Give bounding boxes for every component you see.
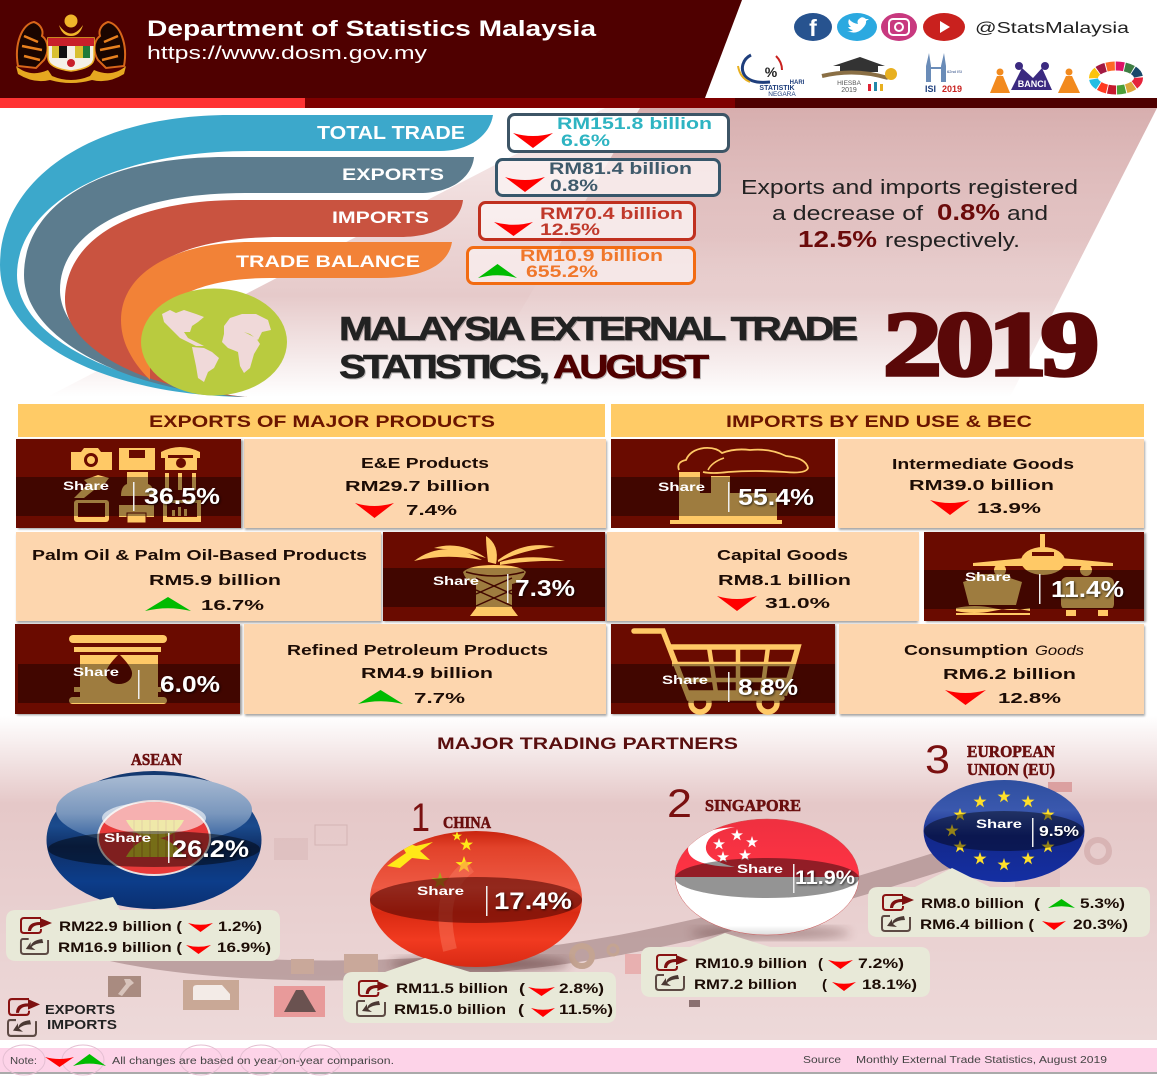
band: share palm oil — [383, 568, 605, 607]
logo: hiesba 2019: 2019 — [841, 87, 857, 94]
rank: 1: 1 — [411, 796, 430, 840]
logo: hari statistik negara: HARI — [790, 80, 805, 86]
band: ASEAN share: Share — [104, 831, 151, 845]
logo: hiesba 2019 — [822, 57, 897, 94]
logo: isi 2019: 2019 — [942, 84, 962, 94]
band: share capital: 11.4% — [1051, 576, 1124, 602]
partner: European Union — [868, 738, 1150, 937]
band: share E&E: 36.5% — [144, 483, 220, 509]
text: E&E values: E&E Products — [361, 455, 489, 472]
text: social handle: @StatsMalaysia — [975, 20, 1129, 37]
globe: China flag — [370, 831, 582, 967]
stat box: total trade: 6.6% — [561, 131, 610, 150]
stat box: trade balance: RM10.9 billion — [520, 246, 663, 265]
partner: Singapore — [641, 782, 930, 997]
heading: exports of major products: EXPORTS OF MAJOR PRODUCTS — [149, 412, 495, 431]
label: European Union — [967, 742, 1056, 779]
band: Singapore share: 11.9% — [795, 868, 855, 889]
band: EU share: Share — [976, 817, 1022, 831]
band: share palm oil: Share — [433, 574, 479, 588]
text block: summary statement: 0.8% — [937, 199, 1000, 225]
panel: palm oil products — [16, 532, 605, 621]
callout: Singapore trade values — [641, 933, 930, 997]
heading: imports by end use and bec: IMPORTS BY END USE & BEC — [726, 412, 1032, 431]
band: Singapore share — [675, 858, 859, 898]
callout: China trade values: RM11.5 billion — [396, 980, 508, 996]
band: China share: 17.4% — [494, 888, 572, 915]
text: consumption values: 12.8% — [998, 690, 1061, 707]
logo: sdg wheel — [1094, 66, 1138, 90]
legend: exports and imports: IMPORTS — [47, 1017, 117, 1032]
text: E&E values: RM29.7 billion — [345, 478, 490, 495]
text: consumption values: Consumption — [904, 642, 1028, 659]
stat box: exports: RM81.4 billion — [549, 159, 692, 178]
ribbon: exports: EXPORTS — [342, 165, 444, 184]
text block: summary statement: a decrease of — [772, 203, 924, 225]
callout: China trade values: 2.8%) — [559, 980, 604, 996]
partner: China — [343, 796, 616, 1023]
text: palm oil values: RM5.9 billion — [149, 572, 281, 589]
heading: imports by end use and bec — [611, 404, 1144, 437]
ribbon: trade balance — [121, 242, 452, 380]
band: share intermediate: Share — [658, 480, 705, 494]
footer note bar: All changes are based on year-on-year comparison. — [112, 1056, 394, 1067]
footer note bar: Monthly External Trade Statistics, August 2019 — [856, 1055, 1108, 1066]
band: share consumption: 8.8% — [738, 674, 798, 700]
logo: isi 2019: ISI — [925, 84, 936, 94]
callout: China trade values: RM15.0 billion — [394, 1001, 506, 1017]
ribbon: total trade: TOTAL TRADE — [317, 123, 465, 143]
stat box: trade balance — [468, 246, 694, 284]
icon: plane ship bus — [956, 534, 1114, 616]
callout: China trade values: 11.5%) — [559, 1001, 613, 1017]
globe: ASEAN flag — [46, 771, 262, 909]
label: China: CHINA — [443, 813, 492, 832]
text: capital values: 31.0% — [765, 595, 830, 612]
background: lower panel — [0, 716, 1157, 1040]
logo: hari statistik negara: NEGARA — [768, 91, 796, 98]
panel: capital goods — [607, 532, 1144, 621]
text: website url: https://www.dosm.gov.my — [147, 43, 427, 63]
logo: hari statistik negara — [738, 55, 805, 98]
text: intermediate values: RM39.0 billion — [909, 477, 1054, 494]
year: 2019: 2019 — [883, 293, 1096, 395]
callout: Singapore trade values: RM7.2 billion — [694, 976, 797, 992]
band: China share — [370, 877, 582, 923]
social icons: f — [809, 15, 817, 41]
logo: isi 2019: 62nd ISI — [947, 69, 962, 74]
callout: Singapore trade values: ( — [822, 976, 827, 992]
ribbon: exports — [24, 157, 474, 397]
text: palm oil values: Palm Oil & Palm Oil-Based Products — [32, 547, 367, 564]
text: intermediate values — [892, 456, 1074, 517]
text: petroleum values: 7.7% — [414, 690, 465, 707]
label: European Union: UNION (EU) — [967, 760, 1055, 779]
text: palm oil values — [32, 547, 367, 614]
stat box: total trade — [508, 114, 728, 152]
ribbon: imports — [65, 200, 463, 397]
panel: consumption goods — [611, 624, 1144, 714]
label: European Union: EUROPEAN — [967, 742, 1056, 761]
stat box: imports: 12.5% — [540, 220, 600, 239]
icon: oil barrel — [69, 635, 167, 704]
callout: Singapore trade values: 7.2%) — [858, 955, 904, 971]
footer note bar: Note: — [10, 1056, 37, 1067]
band: share capital: Share — [965, 570, 1011, 584]
callout: EU trade values: 20.3%) — [1073, 916, 1128, 932]
panel: intermediate goods — [611, 439, 1144, 528]
callout: China trade values — [343, 958, 616, 1023]
stat box: exports: 0.8% — [550, 176, 598, 195]
text block: summary statement: Exports and imports registered — [741, 177, 1078, 199]
text: E&E values: 7.4% — [406, 502, 457, 519]
globe: Singapore flag — [675, 819, 859, 935]
callout: ASEAN trade values: RM16.9 billion ( — [58, 939, 182, 955]
logo: hiesba 2019: HIESBA — [837, 80, 862, 87]
callout: Singapore trade values: RM10.9 billion — [695, 955, 807, 971]
legend: exports and imports — [8, 999, 117, 1036]
title: department name: Department of Statistics Malaysia — [147, 16, 597, 41]
callout: ASEAN trade values — [6, 897, 280, 961]
footer note bar: Source — [803, 1055, 842, 1066]
label: Singapore: SINGAPORE — [705, 796, 801, 815]
band: share consumption — [611, 664, 835, 703]
shadow under China globe — [390, 956, 570, 972]
band: share palm oil: 7.3% — [515, 575, 575, 601]
ribbon: total trade — [0, 115, 493, 397]
ribbon: imports: IMPORTS — [332, 208, 429, 227]
text block: summary statement: 12.5% — [798, 226, 877, 252]
band: share E&E: Share — [63, 479, 109, 493]
logo: hari statistik negara: STATISTIK — [759, 85, 795, 92]
callout: EU trade values — [868, 868, 1150, 937]
social icons — [794, 13, 965, 41]
text: capital values — [717, 547, 851, 612]
icon: palm tree — [414, 536, 565, 616]
text: E&E values — [345, 455, 490, 519]
ribbon: trade balance: TRADE BALANCE — [236, 252, 420, 271]
callout: China trade values: ( — [519, 980, 525, 996]
callout: EU trade values: ( — [1034, 895, 1040, 911]
icon: shopping cart — [634, 631, 798, 712]
band: share intermediate: 55.4% — [738, 484, 814, 510]
text: consumption values: RM6.2 billion — [943, 666, 1076, 683]
stat box: imports: RM70.4 billion — [540, 204, 683, 223]
label: ASEAN: ASEAN — [131, 750, 183, 769]
logo: hari statistik negara: % — [765, 64, 778, 80]
text: petroleum values — [287, 642, 548, 707]
band: ASEAN share: 26.2% — [172, 836, 249, 863]
heading: major trading partners: MAJOR TRADING PARTNERS — [437, 734, 738, 753]
panel: E&E products — [16, 439, 606, 528]
text: intermediate values: Intermediate Goods — [892, 456, 1074, 473]
band: share intermediate — [611, 477, 835, 516]
stat box: imports — [480, 202, 694, 240]
band: ASEAN share — [48, 831, 260, 867]
partner: ASEAN — [6, 750, 280, 961]
band: share petroleum — [18, 664, 240, 703]
main title: AUGUST — [553, 348, 709, 385]
icon: coat of arms — [16, 14, 126, 83]
text block: summary statement — [741, 177, 1078, 252]
footer note bar — [0, 1045, 1157, 1075]
text: capital values: Capital Goods — [717, 547, 848, 564]
stat box: total trade: RM151.8 billion — [557, 114, 712, 133]
background: upper slanted panel — [47, 108, 1157, 397]
band: share E&E — [16, 477, 241, 516]
callout: EU trade values: 5.3%) — [1080, 895, 1125, 911]
text: palm oil values: 16.7% — [201, 597, 264, 614]
band: share capital — [924, 570, 1144, 609]
text: consumption values: Goods — [1035, 642, 1084, 658]
heading: exports of major products — [18, 404, 605, 437]
text: petroleum values: Refined Petroleum Products — [287, 642, 548, 659]
ribbon chart: trade indicators — [0, 115, 493, 397]
callout: ASEAN trade values: RM22.9 billion ( — [59, 918, 182, 934]
band: share petroleum: 6.0% — [160, 671, 220, 697]
panel: refined petroleum products — [15, 624, 606, 714]
text: petroleum values: RM4.9 billion — [361, 665, 493, 682]
callout: EU trade values: RM8.0 billion — [921, 895, 1024, 911]
icon: factory — [670, 448, 808, 524]
header banner — [0, 0, 1157, 108]
text block: summary statement: respectively. — [885, 230, 1020, 252]
text block: summary statement: and — [1007, 203, 1048, 225]
text: capital values: RM8.1 billion — [718, 572, 851, 589]
rank: 3: 3 — [925, 738, 950, 782]
icon: globe — [141, 288, 287, 396]
callout: Singapore trade values: 18.1%) — [862, 976, 917, 992]
shadow under Singapore globe — [690, 926, 850, 940]
icon: electronics — [71, 447, 201, 523]
callout: Singapore trade values: ( — [818, 955, 823, 971]
callout: ASEAN trade values: 16.9%) — [217, 939, 271, 955]
main title: STATISTICS, — [339, 348, 547, 385]
text: consumption values — [904, 642, 1084, 707]
band: share consumption: Share — [662, 673, 708, 687]
logo: banci — [990, 62, 1080, 93]
callout: ASEAN trade values: 1.2%) — [218, 918, 262, 934]
background: road and transport motifs — [60, 782, 1109, 1017]
stat box: exports — [496, 159, 720, 196]
rank: 2: 2 — [667, 782, 692, 826]
stat box: trade balance: 655.2% — [526, 262, 598, 281]
logo: banci: BANCI — [1018, 79, 1046, 89]
legend: exports and imports: EXPORTS — [45, 1002, 115, 1017]
band: EU share: 9.5% — [1039, 823, 1079, 840]
callout: EU trade values: RM6.4 billion ( — [920, 916, 1034, 932]
main title — [339, 310, 857, 385]
logo: isi 2019 — [925, 53, 962, 94]
main title: MALAYSIA EXTERNAL TRADE — [339, 310, 857, 347]
band: share petroleum: Share — [73, 665, 119, 679]
globe: EU flag — [924, 780, 1084, 882]
band: Singapore share: Share — [737, 862, 783, 876]
band: EU share — [924, 811, 1084, 851]
callout: China trade values: ( — [518, 1001, 524, 1017]
band: China share: Share — [417, 884, 464, 898]
text: intermediate values: 13.9% — [977, 500, 1041, 517]
